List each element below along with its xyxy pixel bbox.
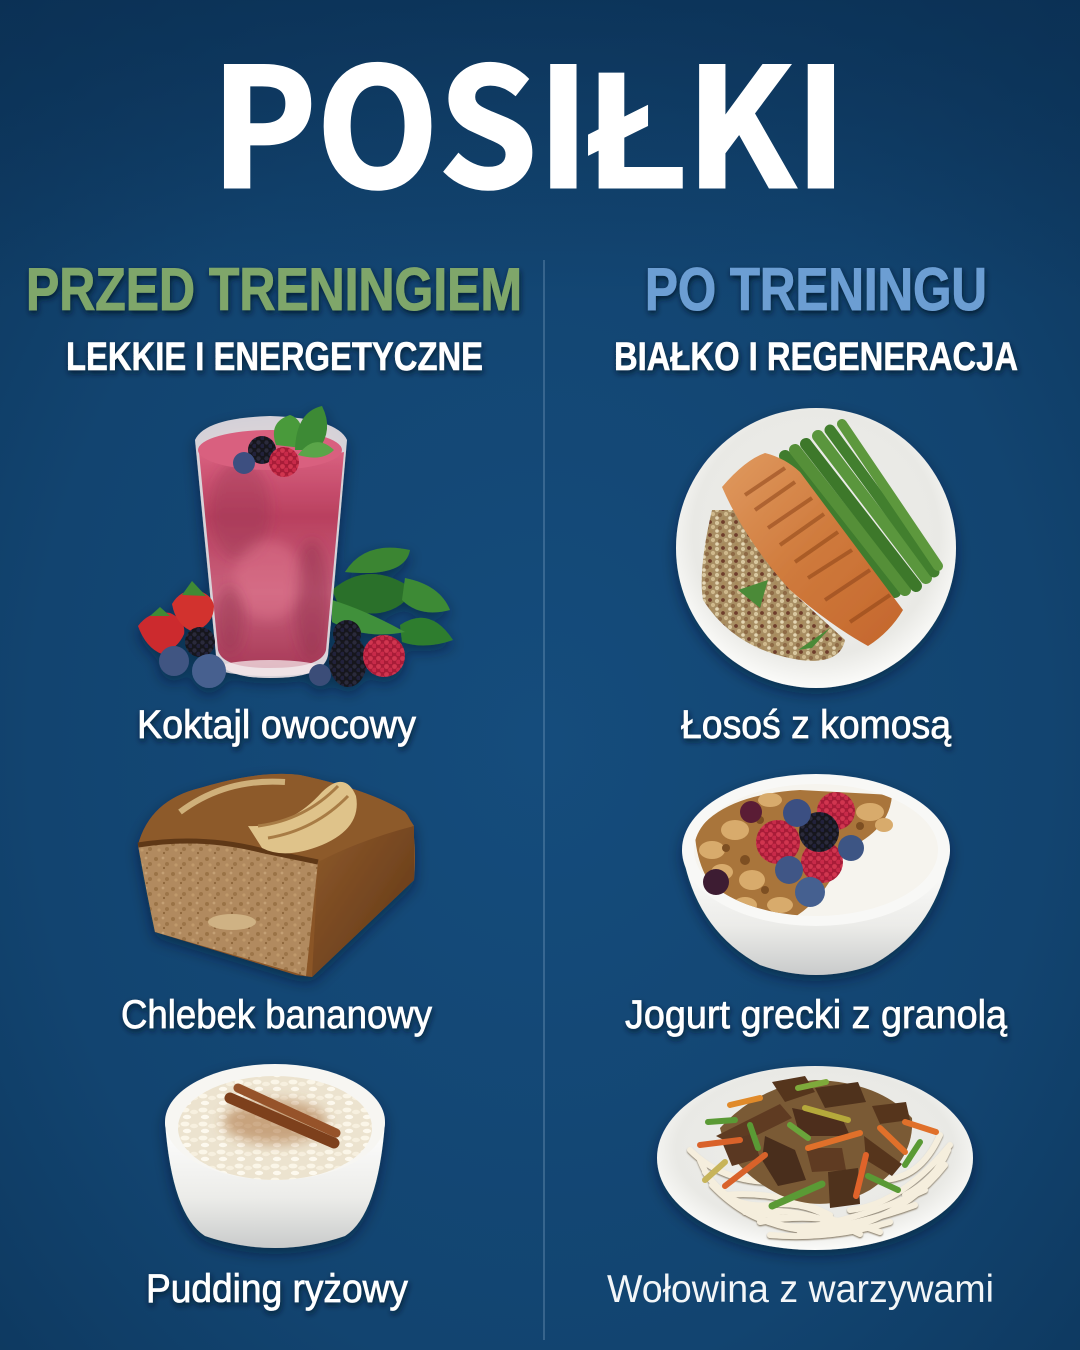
panel: po treningu xyxy=(607,256,1018,1311)
salmon xyxy=(722,453,903,646)
topping berries and basil xyxy=(233,406,334,477)
heading: po treningu: PO TRENINGU xyxy=(645,256,987,323)
icon: greek yogurt with granola xyxy=(682,774,950,975)
strawberries and berries xyxy=(138,581,405,688)
banana slice on top xyxy=(248,782,357,853)
label: łosoś z komosą: Łosoś z komosą xyxy=(681,703,952,747)
label: chlebek bananowy: Chlebek bananowy xyxy=(121,993,432,1037)
berries xyxy=(703,792,864,907)
noodles xyxy=(690,1135,950,1236)
icon: beef with vegetables and noodles xyxy=(657,1066,973,1250)
stir-fry base xyxy=(720,1080,912,1204)
cinnamon sticks xyxy=(230,1088,336,1143)
label: pudding ryżowy: Pudding ryżowy xyxy=(146,1267,408,1311)
label: jogurt grecki z granolą: Jogurt grecki z granolą xyxy=(625,993,1008,1037)
quinoa xyxy=(702,510,845,661)
title: POSIŁKI xyxy=(211,0,847,235)
glass xyxy=(195,416,347,678)
icon: rice pudding xyxy=(165,1064,385,1248)
label: koktajl owocowy: Koktajl owocowy xyxy=(137,703,416,747)
icon: banana bread xyxy=(138,774,415,977)
asparagus xyxy=(785,424,938,592)
beef strips xyxy=(716,1076,910,1208)
label: wołowina z warzywami: Wołowina z warzywami xyxy=(607,1268,994,1311)
panel: przed treningiem xyxy=(26,256,522,1311)
granola xyxy=(695,790,893,925)
vegetables xyxy=(700,1082,936,1206)
heading: przed treningiem: PRZED TRENINGIEM xyxy=(26,256,522,323)
icon: fruit smoothie xyxy=(138,406,453,688)
spinach leaves xyxy=(332,548,453,646)
subheading: lekkie i energetyczne: LEKKIE I ENERGETYCZNE xyxy=(66,335,483,379)
icon: salmon with quinoa xyxy=(676,408,956,688)
